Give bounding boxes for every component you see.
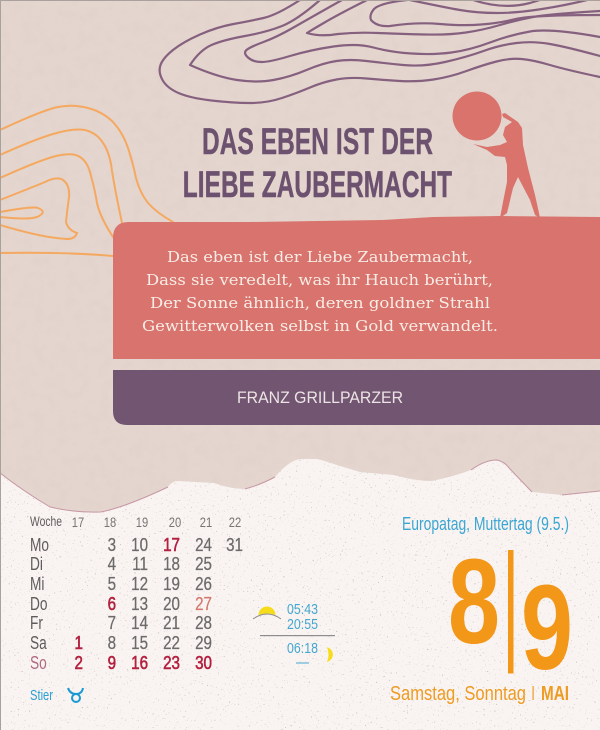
week header bbox=[30, 514, 241, 530]
day numbers: 10 bbox=[131, 535, 148, 555]
weekday and month: MAI bbox=[541, 683, 569, 705]
sun times: 20:55 bbox=[287, 617, 318, 633]
day numbers: 9 bbox=[108, 653, 116, 673]
title bbox=[183, 121, 452, 205]
day numbers bbox=[75, 535, 243, 673]
author bar bbox=[113, 370, 600, 425]
day numbers: 16 bbox=[131, 653, 148, 673]
zodiac label: Stier bbox=[30, 688, 53, 704]
torn paper lower section bbox=[0, 455, 600, 730]
day numbers: 11 bbox=[132, 554, 148, 574]
icon: half moon bbox=[327, 647, 333, 662]
orange contour lines bbox=[0, 106, 173, 256]
day numbers: 30 bbox=[195, 653, 212, 673]
day numbers: 4 bbox=[108, 554, 116, 574]
day numbers: 6 bbox=[108, 594, 116, 614]
big date bbox=[448, 533, 573, 695]
day numbers: 17 bbox=[163, 535, 180, 555]
title: DAS EBEN IST DER bbox=[202, 121, 433, 162]
quote text: Das eben ist der Liebe Zaubermacht, bbox=[167, 248, 473, 266]
week header: 22 bbox=[229, 515, 241, 530]
icon: taurus bbox=[68, 688, 83, 702]
sun times bbox=[287, 602, 318, 633]
moon times: 06:18 bbox=[287, 641, 318, 657]
calendar grid bbox=[30, 514, 243, 674]
quote text: Gewitterwolken selbst in Gold verwandelt. bbox=[142, 317, 498, 335]
week header: 18 bbox=[104, 515, 116, 530]
silhouette: figure holding ball bbox=[452, 92, 540, 218]
week header: 20 bbox=[169, 515, 181, 530]
day numbers: 31 bbox=[226, 535, 243, 555]
day numbers: 25 bbox=[195, 554, 212, 574]
day numbers: 20 bbox=[163, 594, 180, 614]
moon times bbox=[287, 641, 318, 664]
day numbers: 23 bbox=[163, 653, 180, 673]
weekday labels: Mi bbox=[30, 574, 44, 595]
day numbers: 18 bbox=[163, 554, 180, 574]
sun times: 05:43 bbox=[287, 602, 318, 618]
day numbers: 15 bbox=[131, 633, 148, 653]
weekday labels: Fr bbox=[30, 613, 43, 634]
weekday labels: So bbox=[30, 653, 47, 674]
day numbers: 19 bbox=[163, 574, 180, 594]
day numbers: 2 bbox=[75, 653, 83, 673]
icon: sunrise bbox=[253, 606, 281, 619]
quote text bbox=[142, 248, 498, 335]
title: LIEBE ZAUBERMACHT bbox=[183, 164, 452, 205]
day numbers: 22 bbox=[163, 633, 180, 653]
day numbers: 27 bbox=[195, 594, 212, 614]
weekday and month: Samstag, Sonntag bbox=[390, 683, 526, 705]
paper background: upper beige bbox=[0, 0, 600, 520]
big date: 9 bbox=[521, 559, 573, 695]
week header: 17 bbox=[72, 515, 84, 530]
day numbers: 26 bbox=[195, 574, 212, 594]
day numbers: 5 bbox=[108, 574, 116, 594]
quote text: Dass sie veredelt, was ihr Hauch berührt, bbox=[146, 271, 493, 289]
weekday labels bbox=[30, 535, 49, 674]
day numbers: 14 bbox=[131, 613, 148, 633]
weekday labels: Di bbox=[30, 554, 43, 575]
day numbers: 8 bbox=[108, 633, 116, 653]
day numbers: 21 bbox=[163, 613, 180, 633]
day numbers: 13 bbox=[131, 594, 148, 614]
day numbers: 3 bbox=[108, 535, 116, 555]
week header: Woche bbox=[30, 514, 62, 529]
day numbers: 29 bbox=[195, 633, 212, 653]
day numbers: 12 bbox=[131, 574, 148, 594]
weekday labels: Do bbox=[30, 594, 47, 615]
author bar: FRANZ GRILLPARZER bbox=[237, 389, 403, 407]
weekday labels: Sa bbox=[30, 633, 48, 654]
purple contour lines bbox=[160, 0, 600, 103]
week header: 19 bbox=[136, 515, 148, 530]
day numbers: 24 bbox=[195, 535, 212, 555]
day numbers: 7 bbox=[108, 613, 116, 633]
day numbers: 28 bbox=[195, 613, 212, 633]
weekday labels: Mo bbox=[30, 535, 49, 556]
week header: 21 bbox=[200, 515, 212, 530]
day numbers: 1 bbox=[75, 633, 83, 653]
big date: 8 bbox=[448, 533, 500, 669]
quote text: Der Sonne ähnlich, deren goldner Strahl bbox=[150, 294, 490, 312]
quote panel bbox=[113, 216, 600, 359]
